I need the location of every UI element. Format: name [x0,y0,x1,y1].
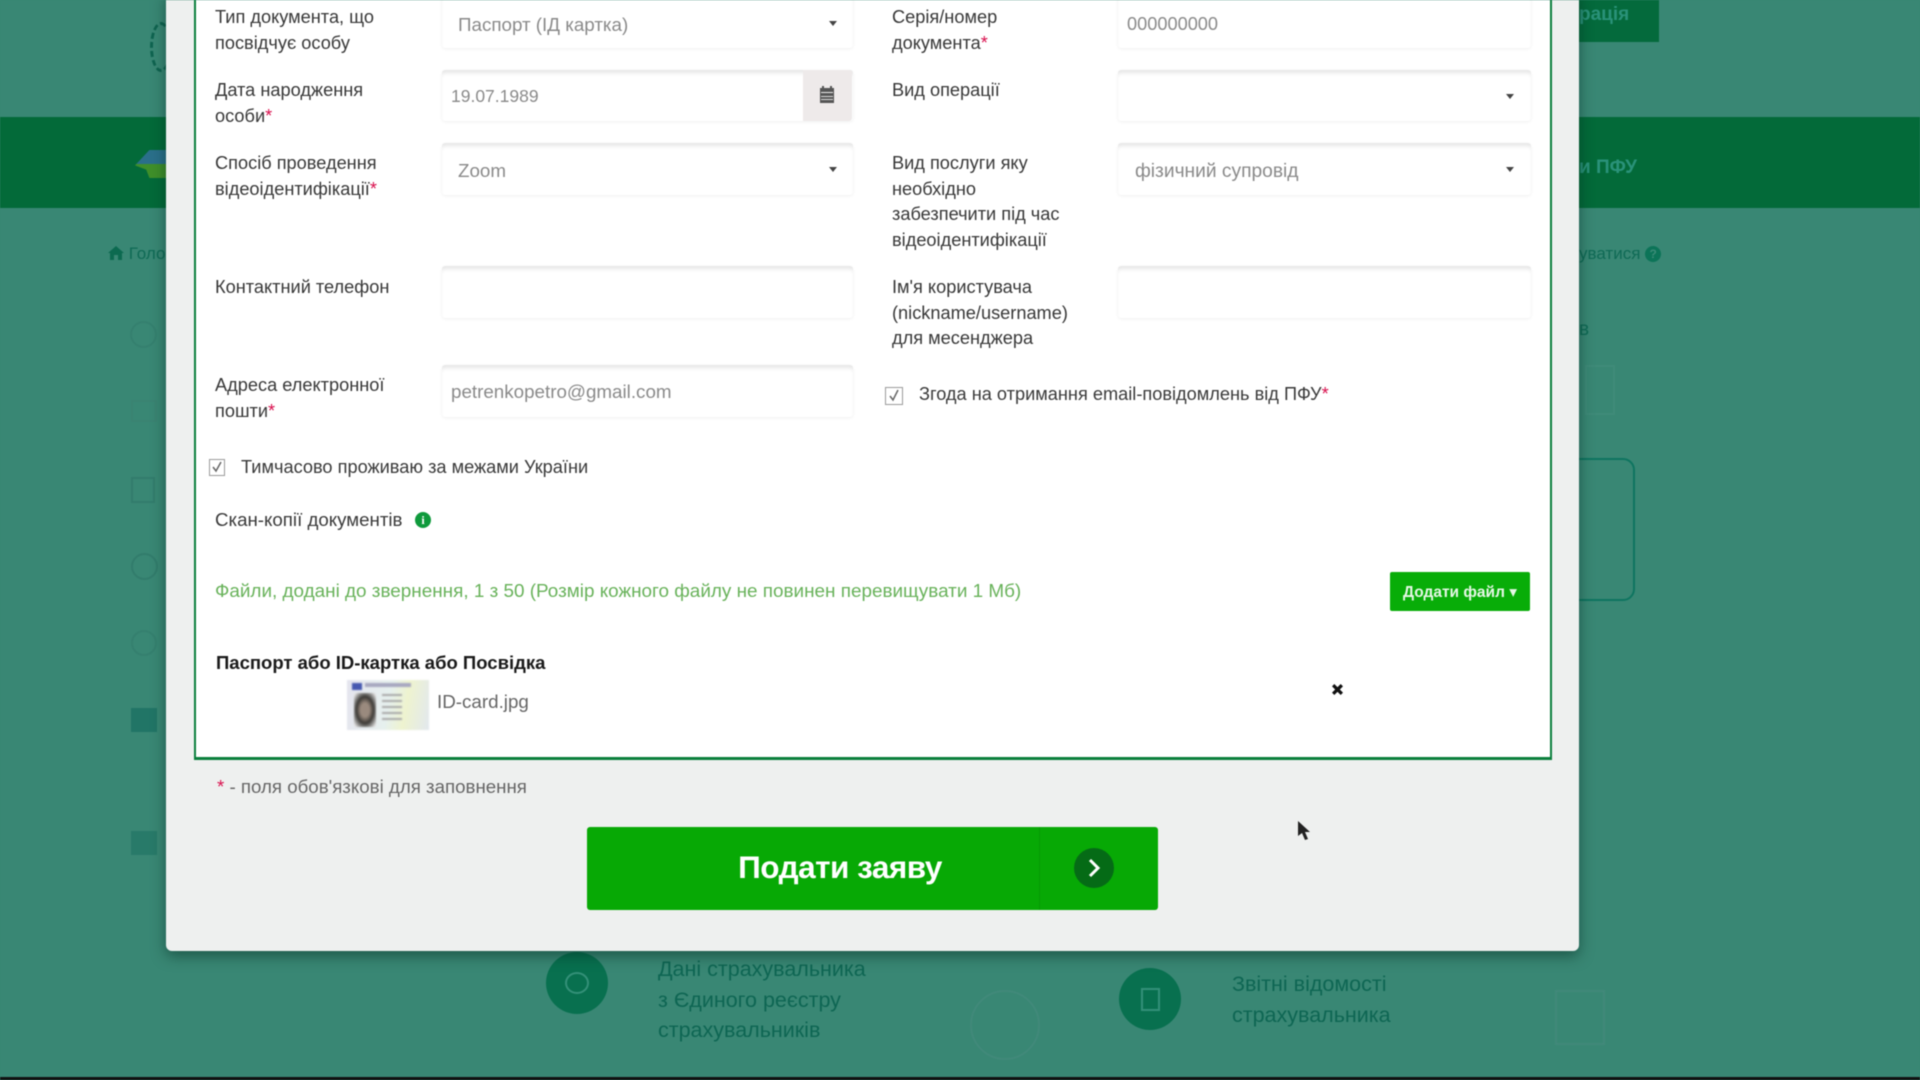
checkbox: email consent [885,387,903,405]
sidebar icon folder [131,708,157,732]
caret three [829,167,837,172]
button: add file [1390,572,1530,611]
reports text [1232,972,1391,1027]
insurer data text: страхувальників [658,1018,820,1042]
heading: passport: Паспорт або ID-картка або Посвідка [216,652,545,673]
right outlined card [1540,458,1635,601]
label: service type: Вид послуги яку [892,153,1028,173]
input: phone [442,266,853,318]
card title [365,683,411,687]
value: passport: Паспорт (ІД картка) [458,14,628,35]
modal dialog [166,0,1579,951]
label: birth date: Дата народження [215,80,363,100]
label: username: Ім'я користувача [892,277,1032,297]
label: service type [892,153,1060,251]
checkbox: abroad [209,459,225,476]
insurer data text: з Єдиного реєстру [658,988,841,1012]
insurer data text [658,957,866,1042]
label: service type: відеоідентифікації [892,230,1047,250]
select: document type [442,0,853,48]
top right button remnant [1500,0,1659,42]
sidebar icon envelope [131,400,157,422]
label: service type: забезпечити під час [892,204,1060,224]
input: username [1118,266,1531,318]
label: birth date [214,80,363,126]
reports text: страхувальника [1232,1002,1391,1026]
header text remnant: и ПФУ [1579,157,1637,178]
value: birth date: 19.07.1989 [451,86,539,106]
caret four [1506,167,1514,172]
sidebar icon folder two [131,831,157,855]
submit text: Подати заяву [738,849,942,885]
header band [0,117,1920,208]
label: operation type: Вид операції [892,80,1000,100]
label: document number: Серія/номер [892,7,997,27]
label: document type: посвідчує особу [215,32,350,52]
input: birth date [442,70,853,121]
caret two [1506,94,1514,99]
caret one [829,21,837,26]
label: username: для месенджера [892,328,1033,348]
button: add file: Додати файл ▾ [1403,584,1517,601]
icon: remove [1332,684,1344,696]
label: document number: документа* [892,32,988,52]
input: email [442,365,853,417]
flag icon remnant [135,150,167,178]
bottom black strip [0,1077,1920,1080]
insurer data text: Дані страхувальника [658,957,866,981]
text: files added: Файли, додані до звернення, 1 з 50 (Розмір кожного файлу не повинен перевищувати 1 Мб) [215,581,1021,602]
sidebar icon list [131,477,155,503]
form panel [194,0,1552,760]
divider [1039,827,1040,910]
text: abroad: Тимчасово проживаю за межами України [241,457,588,477]
label: document number [891,7,998,54]
icon: mouse cursor [1297,820,1310,840]
reports icon [1119,968,1181,1030]
icon: calendar [819,85,835,104]
value: number: 000000000 [1127,14,1218,34]
icon: info: i [421,513,425,527]
faint right icons [1555,990,1605,1045]
calendar button [803,70,852,121]
faint head icon [970,990,1040,1060]
label: document type: Тип документа, що [215,7,374,27]
id card thumbnail [347,680,429,730]
value: email: petrenkopetro@gmail.com [451,381,672,402]
submit button [587,827,1158,910]
label: service type: необхідно [892,178,976,198]
label: username: (nickname/username) [892,302,1068,322]
breadcrumb home [108,244,165,263]
text: email consent: Згода на отримання email-повідомлень від ПФУ* [919,384,1329,404]
value: zoom: Zoom [458,160,506,181]
select: operation type [1118,70,1531,121]
icon: info [415,512,431,528]
sidebar icon circle [130,321,157,348]
label: phone: Контактний телефон [215,277,389,297]
sidebar icon circle two [131,630,157,656]
heading: scans: Скан-копії документів [215,509,402,530]
card portrait [354,693,376,727]
faint right top icon [1585,365,1615,415]
label: email: пошти* [215,400,275,420]
card flag [352,683,362,690]
value: physical escort: фізичний супровід [1135,161,1298,182]
label: identification method: відеоідентифікації* [215,178,377,198]
card data [382,694,402,722]
label: identification method [215,153,378,200]
help link remnant: уватися [1579,244,1640,263]
breadcrumb home: Голо [129,244,165,263]
right text remnant: в [1579,319,1589,340]
label: identification method: Спосіб проведення [215,153,377,173]
select: identification method [442,143,853,195]
insurer data icon [546,952,608,1014]
input: document number [1118,0,1531,48]
label: document type [214,7,374,54]
registration text remnant: рація [1579,4,1629,25]
label: birth date: особи* [215,106,272,126]
required note: * - поля обов'язкові для заповнення [217,776,527,797]
label: email [214,375,385,420]
help link remnant: ? [1649,247,1657,261]
file name: ID-card.jpg [437,691,529,712]
label: username [891,277,1068,349]
reports text: Звітні відомості [1232,972,1386,996]
label: email: Адреса електронної [215,375,384,395]
arrow circle [1074,848,1114,888]
logo arc remnant [150,22,172,72]
sidebar icon info [131,553,158,580]
select: service type [1118,143,1531,195]
